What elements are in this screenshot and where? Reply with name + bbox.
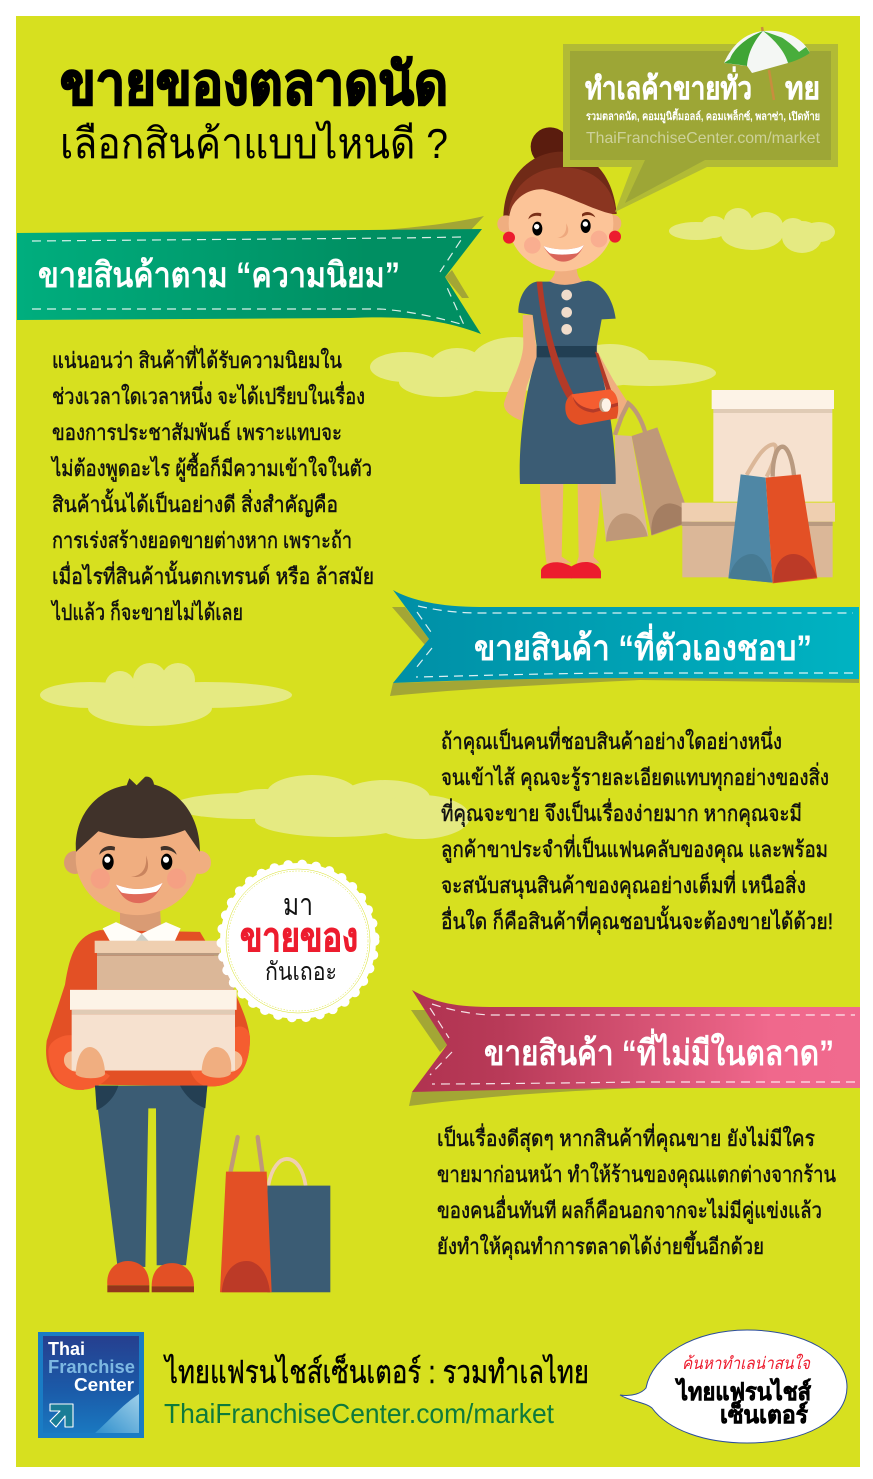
speech bubble: search [620,1330,847,1443]
logo: Thai Franchise Center: Franchise [48,1357,135,1377]
shopping bags beside man [220,1137,330,1292]
icon: umbrella [724,27,810,100]
text: what you like paragraph: จะสนับสนุนสินค้าของคุณอย่างเต็มที่ เหนือสิ่ง [441,870,806,899]
text: popularity paragraph: การเร่งสร้างยอดขายต่างหาก เพราะถ้า [52,528,352,553]
speech sign: market locations [563,44,838,212]
title [60,52,448,167]
sign headline end: ทย [785,71,820,106]
text: popularity paragraph: ช่วงเวลาใดเวลาหนึ่ง จะได้เปรียบในเรื่อง [52,381,365,409]
sign subtitle: รวมตลาดนัด, คอมมูนิตี้มอลล์, คอมเพล็กซ์, พลาซ่า, เปิดท้าย [586,108,820,124]
ribbon 1 label: ขายสินค้าตาม “ความนิยม” [38,256,400,295]
text: what you like paragraph: ที่คุณจะขาย จึงเป็นเรื่องง่ายมาก หากคุณจะมี [441,798,802,827]
text: popularity paragraph: แน่นอนว่า สินค้าที่ได้รับความนิยมใน [52,345,342,373]
cloud: top right [669,208,835,253]
cloud: behind man [173,775,470,839]
badge word 3: กันเถอะ [265,958,337,986]
text: what you like paragraph [441,726,833,935]
bubble line 2: ไทยแฟรนไชส์ [674,1377,811,1406]
footer url: ThaiFranchiseCenter.com/market [164,1398,554,1429]
man carrying boxes [46,777,250,1292]
cloud: middle left [40,663,292,726]
text: not in market paragraph: เป็นเรื่องดีสุดๆ หากสินค้าที่คุณขาย ยังไม่มีใคร [437,1123,815,1152]
cloud: behind woman [370,337,716,397]
text: popularity paragraph [50,345,374,625]
sign url: ThaiFranchiseCenter.com/market [586,130,821,147]
sign headline: ทำเลค้าขายทั่ว [585,66,752,106]
bubble line 3: เซ็นเตอร์ [720,1400,808,1429]
text: popularity paragraph: เมื่อไรที่สินค้านั้นตกเทรนด์ หรือ ล้าสมัย [52,561,374,589]
text: not in market paragraph: ยังทำให้คุณทำการตลาดได้ง่ายขึ้นอีกด้วย [437,1231,764,1260]
text: popularity paragraph: สินค้านั้นได้เป็นอย่างดี สิ่งสำคัญคือ [52,489,338,517]
ribbon: what you like heading [390,590,859,696]
badge word 1: มา [283,889,313,922]
title line 2: เลือกสินค้าแบบไหนดี ? [60,120,448,167]
logo: Thai Franchise Center [38,1332,144,1438]
logo: Thai Franchise Center: Thai [48,1339,85,1359]
ribbon: not in market heading [409,990,860,1106]
badge: let's sell [220,863,376,1019]
text: popularity paragraph: ไม่ต้องพูดอะไร ผู้ซื้อก็มีความเข้าใจในตัว [50,453,372,482]
bubble line 1: ค้นหาทำเลน่าสนใจ [682,1353,811,1373]
gift boxes and bags beside woman [682,390,835,583]
text: popularity paragraph: ของการประชาสัมพันธ์ เพราะแทบจะ [52,420,342,445]
text: popularity paragraph: ไปแล้ว ก็จะขายไม่ได้เลย [50,598,243,625]
badge word 2: ขายของ [240,916,358,960]
footer heading: ไทยแฟรนไชส์เซ็นเตอร์ : รวมทำเลไทย [163,1353,589,1390]
text: not in market paragraph [437,1123,836,1260]
woman with handbag [497,127,692,578]
logo: Thai Franchise Center: Center [74,1375,134,1395]
title line 1: ขายของตลาดนัด [60,52,448,117]
text: what you like paragraph: ถ้าคุณเป็นคนที่ชอบสินค้าอย่างใดอย่างหนึ่ง [441,726,782,755]
ribbon: popularity heading [17,216,484,334]
ribbon 2 label: ขายสินค้า “ที่ตัวเองชอบ” [474,623,812,668]
icon: arrow [50,1404,73,1427]
